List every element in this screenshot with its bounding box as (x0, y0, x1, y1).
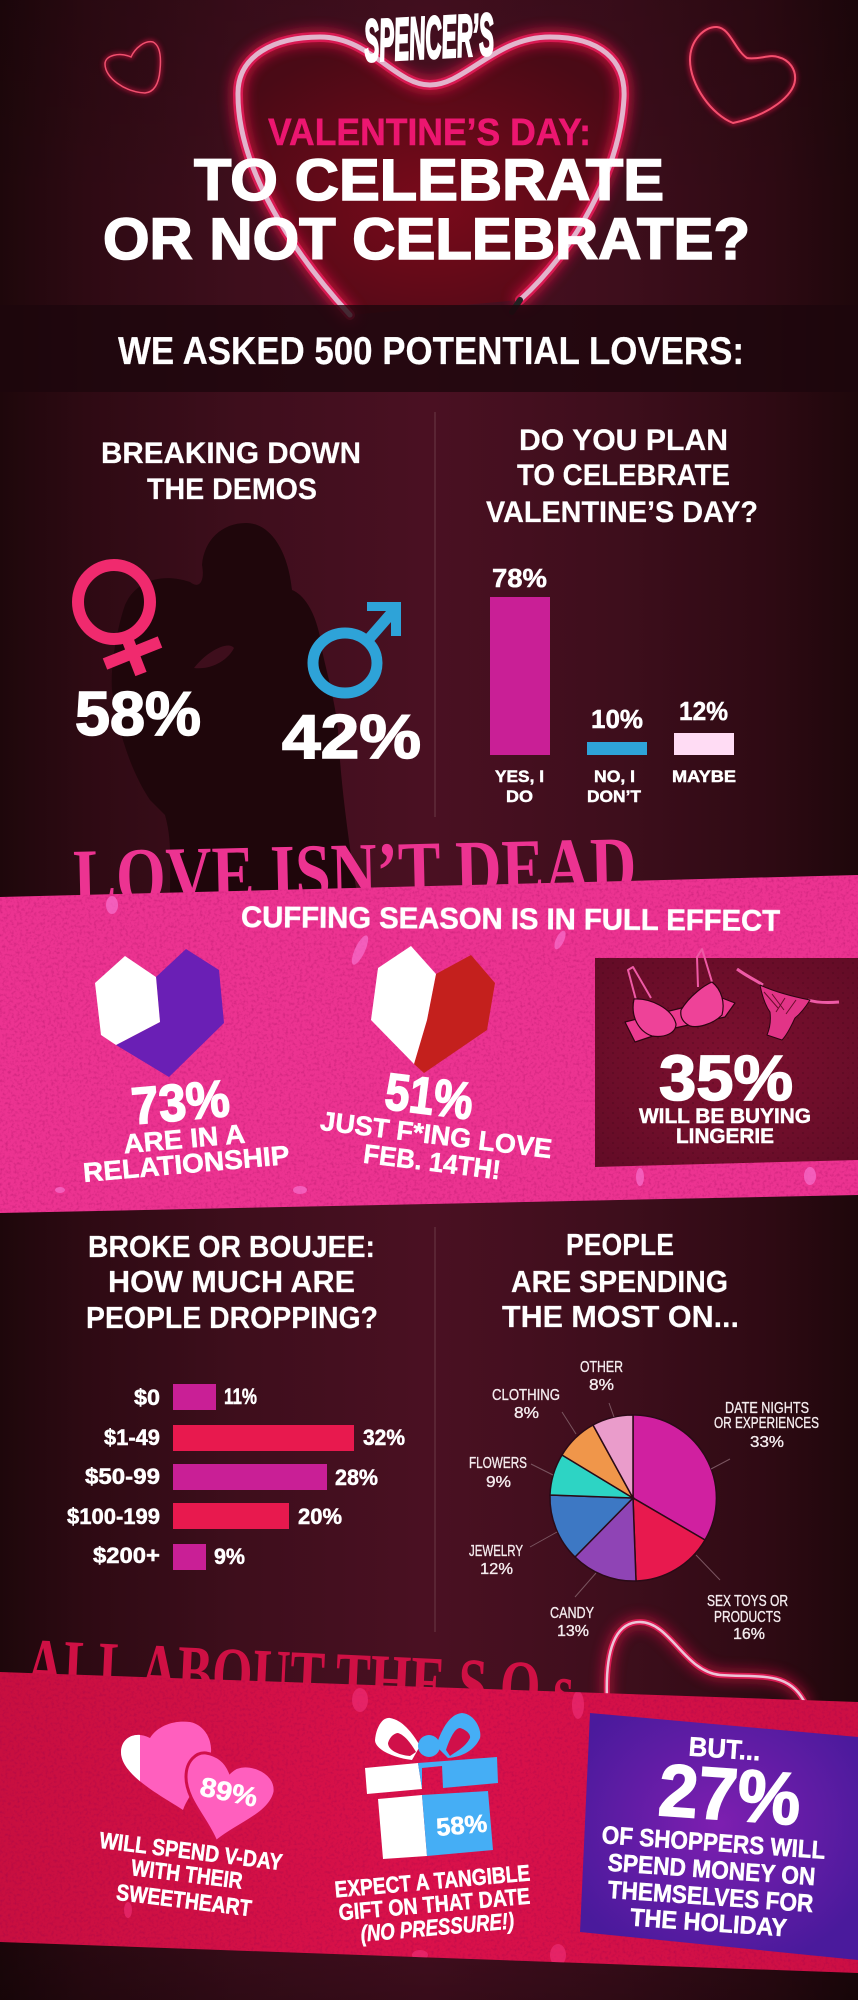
bar chart: 78% (492, 563, 547, 593)
section heading: all about the S.O.s: ALL ABOUT THE S.O.s (24, 1624, 575, 1732)
stat: 73% are in a relationship: 73% (129, 1070, 232, 1136)
stat: 35% will be buying lingerie: 35% (659, 1042, 793, 1114)
bar chart: MAYBE (672, 767, 736, 786)
panel: 27% callout (580, 1713, 858, 1960)
bar chart: 10% (591, 704, 643, 734)
heading: broke or boujee: PEOPLE DROPPING? (86, 1300, 378, 1335)
stat: 51% just love feb 14: JUST F*ING LOVE (319, 1106, 554, 1164)
heading: people are spending: PEOPLE (566, 1227, 674, 1262)
stat: 42%: 42% (282, 703, 421, 772)
heading: people are spending: THE MOST ON... (502, 1299, 739, 1334)
text: will spend v-day: SWEETHEART (115, 1879, 253, 1921)
text: expect a tangible gift (334, 1860, 531, 1947)
pie labels: JEWELRY (469, 1543, 523, 1560)
pie labels: 8% (589, 1377, 614, 1394)
heading: people are spending (502, 1227, 739, 1334)
heading: do you plan: VALENTINE’S DAY? (486, 496, 758, 529)
bar chart: 28% (335, 1465, 378, 1490)
silhouette: couple (112, 523, 358, 900)
stat: 73% are in a relationship (82, 1070, 291, 1188)
heading: people are spending: ARE SPENDING (511, 1264, 728, 1299)
text: will spend v-day (98, 1827, 284, 1921)
pie labels: PRODUCTS (714, 1609, 781, 1626)
bar chart: $0 (134, 1385, 160, 1410)
pie labels: SEX TOYS OR (707, 1593, 788, 1610)
heading: breaking down the demos (101, 437, 361, 506)
pie chart (550, 1415, 716, 1581)
text: expect a tangible gift: EXPECT A TANGIBLE (334, 1860, 531, 1903)
heading: broke or boujee (86, 1229, 378, 1335)
icon: purple white heart (95, 949, 224, 1077)
icon: panties (737, 969, 839, 1040)
panel: spending bar chart (67, 1229, 405, 1570)
pie labels: CANDY (550, 1605, 594, 1622)
bar chart (67, 1384, 405, 1570)
panel: lingerie (595, 949, 858, 1167)
pie labels (469, 1359, 819, 1643)
text: expect a tangible gift: (NO PRESSURE!) (359, 1907, 515, 1947)
icon: gift box: 58% (435, 1810, 488, 1842)
panel: 27% callout: THE HOLIDAY (629, 1904, 788, 1942)
stat: 58%: 58% (75, 680, 201, 749)
title: TO CELEBRATE (194, 148, 664, 213)
heading: cuffing season: CUFFING SEASON IS IN FULL EFFECT (241, 901, 780, 938)
bar chart: DON’T (587, 787, 642, 806)
stat: 51% just love feb 14: FEB. 14TH! (362, 1139, 502, 1185)
divider (434, 1227, 436, 1632)
stat: 51% just love feb 14: 51% (382, 1063, 476, 1131)
bar chart: NO, I (594, 767, 635, 786)
pie labels: 13% (557, 1623, 589, 1640)
panel: 27% callout: OF SHOPPERS WILL (601, 1821, 826, 1865)
title: OR NOT CELEBRATE? (103, 207, 750, 272)
panel: spending pie chart (469, 1227, 819, 1643)
icon: male symbol (313, 602, 401, 693)
pie labels: 8% (514, 1405, 539, 1422)
panel: 27% callout: 27% (656, 1748, 804, 1841)
neon heart: small right (690, 27, 795, 123)
bar chart: YES, I (495, 767, 544, 786)
neon heart: main (238, 37, 624, 315)
stat: 73% are in a relationship: ARE IN A (122, 1119, 246, 1159)
stat: 35% will be buying lingerie: WILL BE BUYING (639, 1105, 811, 1128)
bar chart: 32% (363, 1425, 405, 1450)
bar chart: 11% (224, 1384, 257, 1409)
neon heart: lower (607, 1622, 806, 1705)
bar chart (490, 563, 736, 806)
icon: red white heart (371, 946, 495, 1073)
panel: demographics (75, 437, 421, 772)
text: will spend v-day: WITH THEIR (130, 1854, 244, 1894)
bar chart: $1-49 (104, 1425, 160, 1450)
section heading: love isn't dead: LOVE ISN’T DEAD (72, 821, 637, 923)
bar chart: $100-199 (67, 1504, 160, 1529)
heading: broke or boujee: BROKE OR BOUJEE: (88, 1229, 375, 1264)
pie labels: 12% (480, 1561, 513, 1578)
panel: plan to celebrate (486, 424, 758, 806)
band: we asked: WE ASKED 500 POTENTIAL LOVERS: (118, 330, 744, 373)
stat: 73% are in a relationship: RELATIONSHIP (82, 1140, 291, 1188)
icon: two hearts (121, 1722, 275, 1842)
bar chart: DO (506, 787, 533, 806)
pie labels: 16% (733, 1626, 765, 1643)
pie labels: OTHER (580, 1359, 623, 1376)
heading: do you plan: DO YOU PLAN (519, 424, 728, 457)
bar chart: 9% (214, 1544, 245, 1569)
stat: 35% will be buying lingerie (639, 1042, 811, 1148)
pie labels: DATE NIGHTS (725, 1400, 809, 1417)
text: will spend v-day: WILL SPEND V-DAY (98, 1827, 284, 1875)
panel: 27% callout: SPEND MONEY ON (607, 1849, 816, 1891)
panel: pink band (0, 870, 858, 1220)
bar chart: $200+ (93, 1543, 160, 1568)
neon heart: small left (105, 42, 160, 93)
heading: broke or boujee: HOW MUCH ARE (108, 1264, 355, 1299)
heading: breaking down the demos: THE DEMOS (147, 473, 317, 506)
stat: 51% just love feb 14 (319, 1063, 554, 1185)
pie labels: FLOWERS (469, 1455, 527, 1472)
stat: 35% will be buying lingerie: LINGERIE (676, 1125, 774, 1148)
divider (434, 412, 436, 817)
title (103, 112, 750, 272)
pie labels: CLOTHING (492, 1387, 560, 1404)
pie labels: OR EXPERIENCES (714, 1415, 819, 1432)
icon: bra (625, 949, 735, 1042)
icon: gift box (365, 1713, 498, 1859)
bar chart: 12% (679, 696, 728, 726)
panel: 27% callout: THEMSELVES FOR (607, 1876, 814, 1918)
leader lines (530, 1403, 730, 1597)
title: VALENTINE’S DAY: (268, 112, 591, 154)
bar chart: 20% (298, 1504, 342, 1529)
bar chart: $50-99 (85, 1464, 160, 1489)
panel: 27% callout: BUT... (688, 1732, 762, 1766)
heading: do you plan: TO CELEBRATE (517, 459, 730, 492)
heading: breaking down the demos: BREAKING DOWN (101, 437, 361, 470)
band: we asked (0, 305, 858, 392)
panel: red band (0, 1665, 858, 1980)
logo: Spencer's: SPENCER’S (362, 3, 496, 75)
text: expect a tangible gift: GIFT ON THAT DATE (338, 1883, 531, 1925)
heading: do you plan (486, 424, 758, 529)
pie labels: 9% (486, 1474, 511, 1491)
icon: two hearts: 89% (197, 1771, 260, 1813)
pie labels: 33% (750, 1434, 784, 1451)
icon: female symbol (78, 565, 160, 674)
